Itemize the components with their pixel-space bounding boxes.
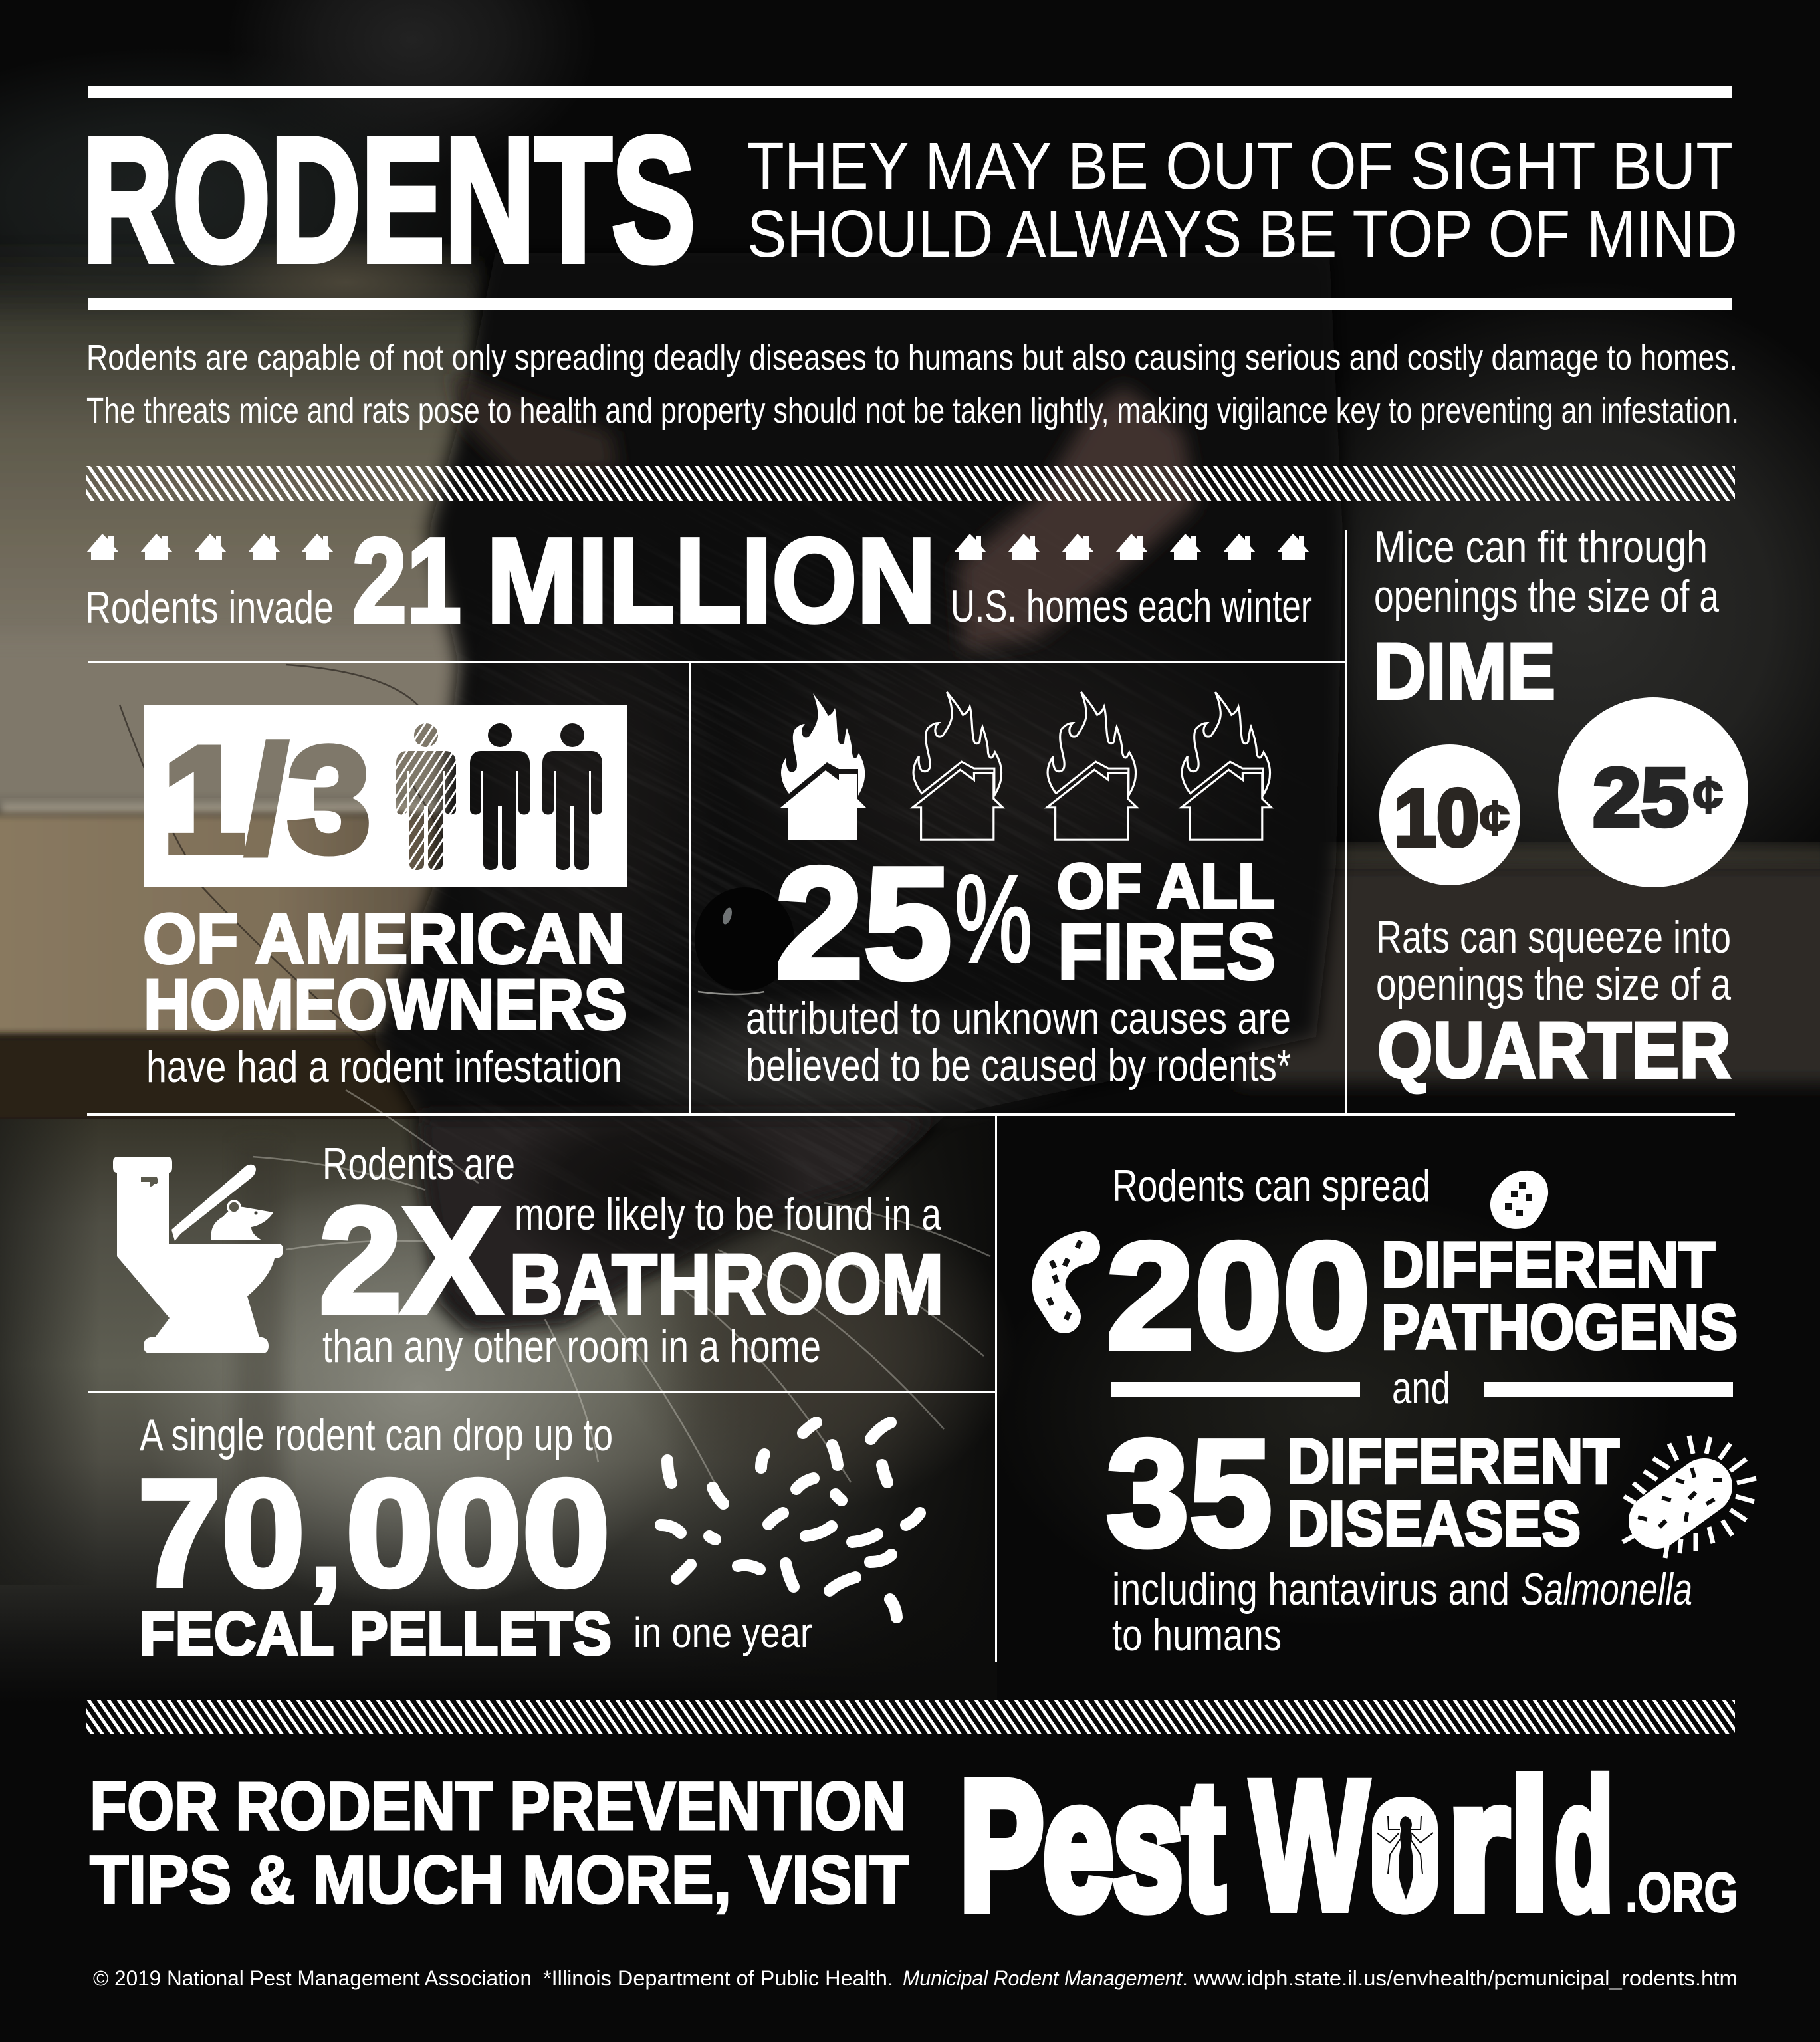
icon: insect in logo (1377, 1816, 1433, 1900)
icon: quarter coin: 25 (1593, 752, 1689, 844)
heading: of American homeowners (143, 899, 627, 1044)
icon: outlined burning house (1047, 692, 1137, 840)
text: attribution note: attributed to unknown causes are (746, 993, 1291, 1044)
heading: different diseases: DIFFERENT (1287, 1426, 1619, 1497)
footer citation: . www.idph.state.il.us/envhealth/pcmunicipal_rodents.htm (1182, 1966, 1738, 1990)
divider with and: and (1392, 1363, 1450, 1413)
stat: 70,000 (138, 1449, 610, 1618)
heading: different pathogens (1381, 1229, 1738, 1363)
text: than any other room: than any other room in a home (322, 1321, 821, 1372)
stat: 25 percent: 25 (775, 836, 952, 1012)
heading: DIME: DIME (1373, 627, 1555, 716)
logo: PestWorld.org: r (1448, 1744, 1509, 1948)
text: rats can squeeze (1376, 912, 1731, 1010)
divider with and (1111, 1363, 1733, 1413)
icon: dime coin: ¢ (1479, 792, 1510, 845)
text: rats can squeeze: Rats can squeeze into (1376, 912, 1731, 963)
intro paragraph (86, 338, 1739, 431)
heading: of American homeowners: HOMEOWNERS (144, 964, 627, 1044)
stat: 70,000: , (310, 1484, 342, 1610)
text: including hantavirus: Salmonella (1521, 1564, 1692, 1615)
icon row: houses right (954, 534, 1309, 560)
footer citation: © 2019 National Pest Management Association (93, 1966, 532, 1990)
stat: 70,000: 70 (138, 1449, 305, 1618)
icon: virus (1623, 1436, 1756, 1558)
footer citation: *Illinois Department of Public Health. (543, 1966, 893, 1990)
icon: toilet with mouse (113, 1157, 283, 1353)
panel: pathogens and diseases (1046, 1161, 1756, 1660)
icon: dime coin: 10 (1394, 772, 1479, 863)
stat: 35: 35 (1106, 1409, 1272, 1578)
panel: 21 million homes (85, 514, 1312, 647)
footer citation: Municipal Rodent Management (903, 1966, 1183, 1990)
call to action: TIPS & MUCH MORE, VISIT (90, 1842, 909, 1918)
hatched divider top (86, 466, 1735, 501)
icon row: houses left (86, 534, 334, 560)
eye of the rodent (695, 887, 794, 994)
icon: dime coin (1379, 744, 1520, 885)
heading: BATHROOM: BATHROOM (509, 1237, 944, 1332)
logo: PestWorld.org: d (1555, 1744, 1613, 1948)
panel: 25 percent of fires (746, 692, 1291, 1091)
heading: different pathogens: DIFFERENT (1381, 1229, 1715, 1300)
hatched divider bottom (86, 1700, 1735, 1734)
logo: PestWorld.org: l (1510, 1744, 1549, 1948)
stat: 25 percent: % (955, 850, 1032, 988)
1/3 badge with people icons (144, 705, 627, 887)
heading: different diseases (1287, 1426, 1619, 1559)
text: U.S. homes each winter: U.S. homes each winter (951, 581, 1312, 631)
call to action (90, 1768, 909, 1918)
heading: different pathogens: PATHOGENS (1381, 1292, 1738, 1363)
footer citation (93, 1966, 1738, 1990)
text: attribution note: believed to be caused by rodents* (746, 1040, 1291, 1091)
tagline: THEY MAY BE OUT OF SIGHT BUT (747, 129, 1733, 203)
icon: scattered pellets (661, 1422, 920, 1617)
text: rodents invade: Rodents invade (85, 582, 334, 633)
text: attribution note (746, 993, 1291, 1091)
text: mice can fit: openings the size of a (1374, 571, 1719, 622)
text: rodents can spread: Rodents can spread (1112, 1161, 1430, 1211)
stat: 21 million: 21 (352, 514, 461, 647)
stat: 2X: 2X (319, 1176, 501, 1344)
stat: 70,000: 000 (346, 1449, 610, 1618)
text: have had a rodent infestation: have had a rodent infestation (146, 1042, 622, 1092)
text: including hantavirus: including hantavirus and (1112, 1564, 1510, 1615)
text: including hantavirus (1112, 1564, 1692, 1660)
panel: bathroom (113, 1139, 944, 1372)
logo: PestWorld.org: .ORG (1625, 1861, 1738, 1924)
icon: outlined burning house (1181, 692, 1271, 840)
icon: outlined burning house (913, 692, 1002, 840)
header top rule (88, 86, 1732, 98)
heading: of all fires: OF ALL (1057, 851, 1275, 922)
logo: PestWorld.org (960, 1744, 1738, 1948)
panel: dime and quarter (1373, 522, 1748, 1095)
logo: PestWorld.org: W (1251, 1744, 1369, 1948)
text: rats can squeeze: openings the size of a (1376, 959, 1731, 1010)
text: including hantavirus: to humans (1112, 1610, 1282, 1660)
text: in one year: in one year (633, 1609, 812, 1656)
call to action: FOR RODENT PREVENTION (90, 1768, 906, 1844)
logo: PestWorld.org: o (1375, 1744, 1435, 1948)
tagline (747, 129, 1738, 271)
heading: of American homeowners: OF AMERICAN (143, 899, 626, 978)
title: RODENTS: RODENTS (82, 101, 695, 298)
heading: of all fires: FIRES (1058, 907, 1276, 996)
stat: 200: 200 (1106, 1212, 1371, 1381)
stat: 21 million: MILLION (487, 514, 936, 647)
icon: oval bacterium (1490, 1171, 1548, 1229)
header bottom rule (88, 298, 1732, 310)
icon: quarter coin (1558, 697, 1748, 887)
panel: fecal pellets (138, 1410, 920, 1668)
logo: PestWorld.org: Pest (960, 1744, 1224, 1946)
panel: one third of homeowners (143, 705, 627, 1092)
text: single rodent: A single rodent can drop up to (140, 1410, 613, 1460)
heading: FECAL PELLETS: FECAL PELLETS (140, 1600, 612, 1668)
stat: 25 percent (775, 836, 1032, 1012)
heading: QUARTER: QUARTER (1377, 1006, 1731, 1095)
text: mice can fit (1374, 522, 1719, 622)
text: more likely: more likely to be found in a (514, 1189, 941, 1240)
icon: bean bacterium (1046, 1240, 1083, 1321)
icon: quarter coin: ¢ (1692, 765, 1724, 824)
text: mice can fit: Mice can fit through (1374, 522, 1708, 572)
text: rodents are: Rodents are (322, 1139, 515, 1189)
heading: different diseases: DISEASES (1287, 1488, 1581, 1559)
heading: of all fires (1057, 851, 1276, 996)
icon: filled burning house (780, 693, 866, 840)
